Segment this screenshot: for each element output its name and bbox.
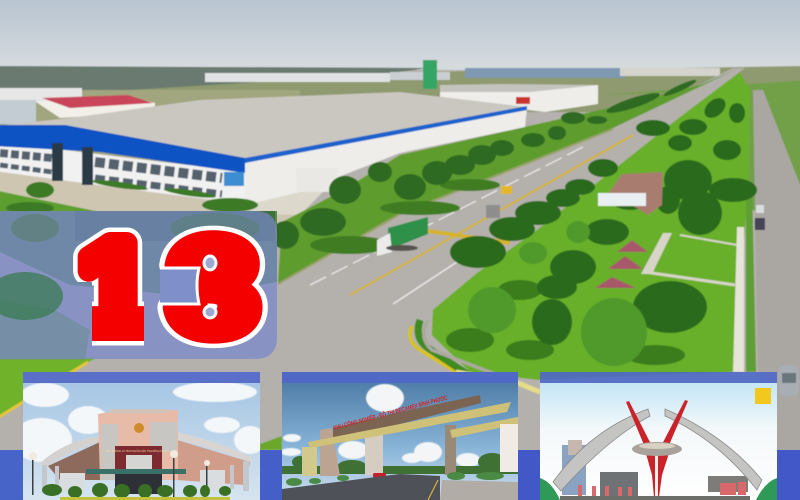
gate golden roof bbox=[308, 402, 511, 448]
tower roof cap bbox=[110, 409, 167, 413]
far tree line bbox=[282, 453, 518, 474]
yellow logo badge bbox=[755, 388, 771, 404]
forecourt lawn bbox=[60, 497, 230, 500]
shrubs bbox=[42, 483, 231, 498]
strip beside service road bbox=[733, 227, 744, 372]
gate left pavilion bbox=[302, 447, 317, 476]
photo bbox=[281, 383, 518, 500]
factory blue right trim bbox=[245, 106, 527, 163]
red and white row right bbox=[720, 482, 746, 495]
left arch bbox=[553, 409, 650, 491]
card: industrial park gate bbox=[281, 372, 518, 500]
red and white row left bbox=[578, 485, 632, 498]
panel: number 13 bbox=[0, 211, 277, 361]
park path bbox=[424, 320, 500, 376]
red V mast bbox=[626, 400, 688, 497]
park pavilion bbox=[598, 172, 663, 215]
park kerb bbox=[410, 326, 456, 372]
factory stair towers bbox=[52, 143, 93, 185]
roadside tree shadows bbox=[310, 179, 500, 254]
roadside kerb bbox=[278, 129, 613, 284]
factory blue fascia bbox=[0, 125, 245, 173]
silver car bbox=[779, 365, 799, 396]
translucent blue panel bbox=[0, 211, 277, 359]
card: administrative building bbox=[12, 372, 266, 500]
number 1: 1 bbox=[80, 216, 150, 357]
far left buildings bbox=[0, 88, 155, 124]
emblem bbox=[134, 423, 144, 433]
left roof wing bbox=[39, 436, 101, 466]
median grass bbox=[418, 320, 470, 376]
road centre line bbox=[428, 480, 438, 500]
right arch bbox=[665, 409, 762, 490]
photo bbox=[540, 383, 777, 500]
park tree shadows bbox=[446, 280, 685, 365]
lower right ground bbox=[540, 372, 760, 400]
red car bbox=[373, 473, 386, 478]
card: monument arch gate bbox=[540, 372, 777, 500]
wing facades bbox=[48, 442, 100, 480]
factory roof bbox=[0, 92, 527, 160]
far right green area bbox=[600, 80, 800, 210]
card header bar bbox=[23, 372, 260, 383]
distant fields bbox=[130, 66, 800, 112]
clouds bbox=[281, 384, 480, 467]
road bbox=[282, 474, 440, 500]
truck bbox=[377, 217, 428, 256]
small vehicles bbox=[486, 186, 765, 230]
tower side panels bbox=[101, 422, 177, 480]
right side buildings bbox=[708, 476, 748, 492]
roadside lawn bbox=[278, 70, 735, 283]
sky bbox=[0, 0, 800, 70]
blue block centre right bbox=[518, 450, 540, 500]
blue block left bbox=[0, 450, 23, 500]
second factory bbox=[440, 84, 598, 112]
factory windows bbox=[0, 153, 222, 194]
lower left lawn bbox=[0, 358, 97, 420]
ring disc bbox=[632, 442, 682, 456]
central tower bbox=[98, 410, 178, 480]
left kerb bbox=[0, 362, 88, 420]
tinted scenery in panel bbox=[0, 213, 260, 320]
blue block right bbox=[777, 450, 800, 500]
factory annex bbox=[296, 168, 338, 192]
distant factories bbox=[205, 60, 720, 89]
gate pillars bbox=[320, 425, 456, 476]
entrance bbox=[115, 474, 162, 494]
factory right wall bbox=[245, 109, 527, 205]
lower park kerb bbox=[456, 372, 540, 392]
canopy bbox=[86, 469, 186, 474]
road bbox=[560, 496, 750, 500]
service road bbox=[753, 90, 800, 500]
clouds bbox=[12, 382, 266, 462]
right roof wing bbox=[177, 432, 253, 462]
building name plate: VĂN PHÒNG ỦY BAN NHÂN DÂN TỈNH BÌNH PHƯỚC bbox=[106, 448, 170, 453]
photo bbox=[12, 382, 266, 500]
park walkway bbox=[641, 233, 737, 285]
number 1: 1 bbox=[80, 216, 150, 357]
left side buildings bbox=[562, 440, 638, 496]
white wall bbox=[500, 424, 518, 472]
card header bar bbox=[540, 372, 777, 383]
disc highlight bbox=[639, 443, 675, 449]
distant tree line bbox=[0, 66, 430, 92]
pavement bbox=[440, 480, 518, 500]
wing columns bbox=[42, 461, 249, 492]
lighter park trees bbox=[468, 221, 647, 366]
park pavilion roofs bbox=[595, 240, 648, 288]
park trees bbox=[450, 94, 757, 345]
factory front wall bbox=[0, 145, 245, 204]
gate main beam bbox=[333, 395, 481, 437]
gate sign text: KHU CÔNG NGHIỆP - ĐÔ THỊ BECAMEX BÌNH PHƯỚC bbox=[332, 394, 449, 432]
gate lower roof bbox=[450, 417, 518, 438]
blue block centre left bbox=[260, 450, 282, 500]
road markings bbox=[310, 135, 633, 304]
green strip by service road bbox=[746, 190, 756, 372]
park lawn bbox=[432, 72, 750, 380]
shrubs bbox=[286, 472, 504, 486]
scenery under panel bbox=[0, 211, 277, 360]
building name plate bbox=[106, 446, 170, 470]
hedges and shrubs bbox=[6, 178, 258, 214]
green domes bbox=[540, 478, 777, 500]
number 3: 3 bbox=[171, 214, 256, 361]
green wedge between cards bbox=[260, 436, 282, 450]
side pavilions bbox=[60, 470, 225, 492]
number 3: 3 bbox=[171, 214, 256, 361]
left driveway and verge bbox=[0, 165, 330, 225]
lamp posts bbox=[29, 450, 210, 500]
factory sign bbox=[224, 172, 244, 186]
card header bar bbox=[282, 372, 518, 383]
ground behind factory bbox=[0, 90, 300, 220]
roadside trees bbox=[271, 78, 698, 249]
